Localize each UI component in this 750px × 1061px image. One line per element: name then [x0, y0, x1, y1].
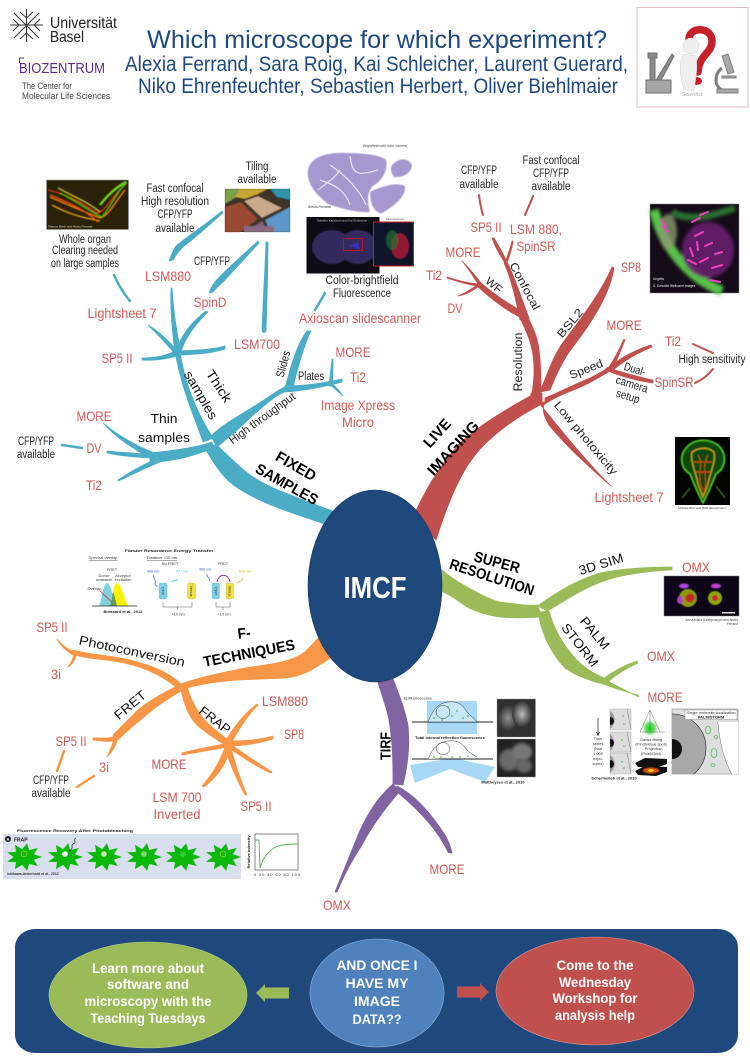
branch labels: SUPER [472, 548, 522, 577]
image: 3D SIM cells [664, 576, 739, 626]
FRET molecules: 528 nm [239, 570, 251, 574]
instrument names: Micro [342, 414, 374, 430]
notes: CFP/YFP [158, 209, 193, 221]
large palm panel: PALM/STORM [698, 714, 725, 720]
branch labels: 3D SIM [577, 550, 625, 578]
instrument names: SP5 II [56, 733, 86, 749]
instrument names: LSM880 [145, 268, 191, 284]
image: FRET figure [87, 548, 251, 616]
instrument names: SP5 II [102, 350, 132, 366]
branch labels [78, 625, 296, 737]
gaussian text: → Projection [640, 746, 662, 751]
gaussian text: (Pixel/Grid) [641, 751, 662, 756]
branch labels: Photoconversion [78, 632, 186, 670]
title: Which microscope for which experiment? [147, 26, 607, 54]
figure title: Fluorescence Recovery After Photobleaching [17, 828, 134, 833]
image: PALM/STORM figure [591, 709, 740, 782]
notes: on large samples [51, 258, 119, 270]
no FRET molecules: 477 nm [176, 570, 188, 574]
branch labels [420, 261, 650, 479]
notes: Fluorescence [333, 288, 391, 300]
branch labels: Dual- [622, 361, 647, 379]
instrument names: Inverted [154, 806, 200, 822]
arrow: right to red [457, 983, 489, 1001]
sub headings [89, 555, 229, 582]
branch labels: Plates [298, 371, 324, 383]
sub headings: Acceptor [115, 573, 132, 578]
credit: Ungella [653, 277, 664, 281]
citation: Schermelleh et al., 2010 [591, 776, 637, 780]
instrument names: LSM 880, [510, 221, 562, 237]
centre ellipse: IMCF [308, 490, 442, 682]
instrument names [36, 619, 308, 822]
Biozentrum tagline: The Center for [22, 81, 72, 91]
instrument names: SP5 II [36, 619, 68, 635]
instrument names: Lightsheet 7 [88, 305, 157, 321]
branch labels: Thick [203, 367, 235, 406]
instrument names: Lightsheet 7 [594, 489, 664, 505]
FRET molecules: Venus [228, 585, 233, 597]
note: available [32, 788, 70, 800]
bubble: wednesday workshop: analysis help [555, 1007, 635, 1023]
tree shape [438, 567, 672, 697]
instrument names: MORE [446, 244, 480, 260]
instrument names: MORE [606, 317, 642, 333]
arrow: time series [596, 718, 600, 736]
left microscope [646, 53, 674, 93]
instrument names: MORE [152, 756, 186, 772]
FRET molecules: <10 nm [217, 612, 231, 616]
branch labels: samples [181, 368, 221, 423]
large palm panel [672, 708, 738, 774]
FRET molecules [199, 568, 251, 616]
bubble: teaching tuesdays: Teaching Tuesdays [90, 1010, 206, 1026]
image: brightfield histology [307, 144, 412, 213]
spectra chart [87, 583, 137, 606]
no FRET molecules: Venus [189, 585, 194, 597]
note: CFP/YFP [33, 775, 69, 787]
connector lines [57, 751, 94, 787]
bubble: image data question: DATA?? [352, 1011, 402, 1027]
icon: scientist with question mark [637, 8, 748, 107]
branch: fixed samples [17, 161, 421, 526]
logo: Biozentrum: Molecular Life Sciences [22, 91, 110, 101]
instrument names: Ti2 [350, 369, 366, 385]
bubble: image data question: IMAGE [354, 993, 400, 1009]
centre label: IMCF [344, 570, 406, 605]
sub headings: Distance <10 nm [147, 555, 178, 560]
time series text: (Nxn [594, 746, 602, 751]
no FRET molecules: CFP [161, 587, 166, 595]
notes: High resolution [141, 196, 209, 208]
image: FRAP figure [3, 828, 301, 879]
notes: available [460, 179, 498, 191]
branch: F-techniques [32, 619, 335, 822]
image: coloured tiles [225, 189, 290, 232]
cell panel: A [7, 836, 10, 842]
branch labels: RESOLUTION [447, 556, 536, 599]
caption bottom: Alexia Ferrand [307, 205, 332, 209]
instrument names: OMX [682, 559, 711, 575]
branch labels: SAMPLES [252, 460, 321, 509]
recovery chart: Relative intensity [246, 835, 251, 868]
icon: Basel star [10, 9, 43, 42]
instrument names: Ti2 [86, 477, 102, 493]
notes: CFP/YFP [194, 256, 230, 268]
branch label: TIRF [377, 732, 394, 760]
cell panel [3, 834, 241, 879]
no FRET molecules: 406 nm [147, 570, 159, 574]
branch labels: TECHNIQUES [202, 637, 296, 671]
branch labels: F- [237, 625, 251, 643]
branch labels: Confocal [507, 261, 542, 312]
instrument names [647, 559, 711, 705]
bubble: teaching tuesdays: software and [107, 976, 189, 992]
instrument names: LSM880 [262, 693, 308, 709]
bubble: image data question [310, 939, 444, 1047]
bubble: teaching tuesdays: Learn more about [92, 960, 204, 976]
cell panel: Ishikawa-Ankerhold et al., 2012 [7, 872, 59, 876]
branch labels: camera [614, 374, 650, 396]
image: Ungella: S. Schudlin Wellcome Images [653, 284, 696, 288]
sub headings: excitation [115, 577, 131, 582]
citation: Brossard et al., 2012 [104, 609, 143, 614]
bubble: teaching tuesdays [49, 942, 247, 1048]
gaussian text [635, 737, 667, 756]
instrument names: Ti2 [665, 333, 681, 349]
branch labels: PALM [577, 614, 613, 652]
bubble: image data question: AND ONCE I [336, 957, 418, 973]
branch labels: FRAP [196, 703, 234, 737]
instrument names [426, 219, 694, 505]
notes [17, 161, 398, 461]
time series text: Time [594, 736, 603, 741]
notes: CFP/YFP [18, 436, 54, 448]
branch labels: Slides [275, 349, 293, 379]
image: Ungella [650, 204, 739, 293]
instrument names: SP8 [621, 259, 641, 275]
instrument names: LSM 700 [152, 789, 202, 805]
branch labels [138, 349, 324, 509]
branch labels: STORM [558, 620, 602, 670]
notes: Clearing needed [52, 245, 118, 257]
large palm panel: Single molecule localization [686, 710, 736, 715]
tree shape [414, 238, 653, 540]
instrument names: SpinD [194, 294, 226, 310]
note [32, 775, 70, 800]
instrument names: OMX [647, 648, 676, 664]
white veins [318, 156, 378, 205]
notes: Fast confocal [146, 183, 204, 195]
branch labels: Speed [568, 358, 605, 382]
notes: available [532, 181, 570, 193]
authors: Alexia Ferrand, Sara Roig, Kai Schleicher, Laurent Guerard, [125, 53, 628, 76]
recovery chart: 0 20 40 60 80 100 [254, 872, 301, 877]
sub headings: FRET [218, 561, 229, 566]
image: TIRF figure [404, 696, 536, 784]
notes: CFP/YFP [461, 165, 497, 177]
image: zebrafish [675, 437, 730, 510]
instrument names: OMX [323, 897, 352, 913]
bubble: wednesday workshop [496, 937, 694, 1045]
sub headings: Donor [99, 573, 110, 578]
branch: super resolution [438, 548, 711, 705]
instrument names: Ti2 [426, 267, 442, 283]
notes: Fast confocal [522, 155, 580, 167]
credit: Anna-Maria Galeppiosyph and Alexia [686, 618, 738, 622]
notes: Tiling [246, 161, 268, 173]
bubble: teaching tuesdays: microscopy with the [84, 993, 212, 1009]
branch: live imaging [414, 155, 746, 540]
tree shape [103, 211, 343, 526]
connector lines [62, 275, 325, 448]
instrument names: DV [86, 440, 102, 456]
micrograph TIRF [497, 739, 536, 777]
time series text: expo- [593, 756, 604, 761]
notes: Whole organ [59, 234, 111, 246]
logo: University of Basel: Basel [50, 29, 84, 46]
arrow: left to green [256, 984, 289, 1002]
sub headings: No FRET [162, 561, 179, 566]
instrument names: SP8 [284, 726, 304, 742]
inset [374, 222, 414, 266]
TIRF diagram: Total internal reflection fluorescence [415, 735, 486, 740]
instrument names [76, 268, 421, 493]
branch labels: setup [614, 388, 641, 406]
caption Scientist: Scientist [682, 92, 703, 98]
branch labels [447, 548, 625, 670]
instrument names: SP5 II [240, 798, 272, 814]
caption: Takahiro Kanamori and Kai Schleicher [317, 218, 367, 222]
time series text: 1,000 [593, 751, 604, 756]
university name: Universität [50, 15, 118, 32]
notes: Color-brightfield [326, 275, 398, 287]
right microscope [716, 54, 738, 93]
instrument names: Axioscan slidescanner [299, 310, 421, 326]
branch labels: High throughput [227, 390, 299, 447]
bubble: image data question: HAVE MY [346, 975, 409, 991]
instrument names: SpinSR [516, 238, 556, 254]
credit: Charles Betz and Wolf Heusermann [678, 506, 726, 510]
panel: footer [15, 929, 738, 1053]
Biozentrum wordmark: BIOZENTRUM [19, 61, 105, 77]
authors [125, 53, 628, 98]
image: brain slice fluorescence: Fluorescence [386, 217, 404, 221]
micrograph widefield [497, 699, 536, 737]
notes [460, 155, 746, 366]
image: 3D SIM cells: Ferrand [727, 622, 738, 626]
notes: CFP/YFP [533, 168, 569, 180]
white figure [680, 38, 699, 90]
bubble: wednesday workshop: Come to the [556, 957, 634, 973]
gaussian spot [640, 710, 665, 738]
instrument names: MORE [336, 344, 370, 360]
tissue lobes [308, 153, 412, 213]
instrument names [323, 861, 464, 913]
branch labels: Thin [150, 411, 178, 426]
instrument names: MORE [648, 689, 682, 705]
instrument names: 3i [99, 759, 109, 775]
caption top: Brightfield with color camera [363, 144, 407, 148]
credit: Stavros Berth and Alexia Ferrand [48, 224, 93, 228]
FRET molecules: CFP [214, 587, 219, 595]
image: whole organ [46, 180, 128, 230]
time series text [592, 736, 604, 766]
branch labels: FRET [111, 687, 149, 723]
instrument names: SP5 II [470, 219, 502, 235]
bubble: wednesday workshop: Workshop for [552, 990, 638, 1006]
logo: University of Basel [10, 9, 118, 46]
instrument names: LSM700 [234, 336, 280, 352]
citation: Mattheyses et al., 2010 [481, 780, 525, 784]
time frames [610, 709, 631, 774]
instrument names: MORE [430, 861, 464, 877]
branch labels: Low photoxicity [551, 400, 620, 478]
widefield diagram: Epifluorescence [404, 696, 433, 700]
branch labels: Resolution [513, 332, 525, 392]
instrument names: 3i [51, 666, 61, 682]
recovery chart [246, 834, 301, 877]
gaussian text: Gauss fitting [640, 737, 662, 742]
branch labels: LIVE [420, 416, 455, 451]
no FRET molecules: >10 nm [171, 612, 185, 616]
instrument names: MORE [76, 408, 112, 424]
sub headings: FRET [107, 567, 118, 572]
notes: available [156, 223, 194, 235]
heat layers [635, 758, 667, 776]
time series text: sures) [592, 761, 604, 766]
branch labels: WF [483, 275, 504, 296]
authors: Niko Ehrenfeuchter, Sebastien Herbert, Oliver Biehlmaier [138, 75, 618, 98]
bubble: wednesday workshop: Wednesday [559, 974, 631, 990]
notes: available [17, 449, 55, 461]
figure title: Förster Resonance Energy Transfer [124, 548, 214, 553]
FRET molecules: 406 nm [199, 568, 211, 572]
branch labels: FIXED [272, 448, 319, 485]
instrument names: Image Xpress [321, 397, 395, 413]
no FRET molecules [147, 570, 196, 616]
red question mark [689, 30, 712, 72]
image: brain slice fluorescence [306, 217, 414, 274]
sub headings: emission [96, 577, 112, 582]
sub headings: Spectral overlap [89, 555, 118, 560]
notes: available [238, 174, 276, 186]
branch labels: BSL2 [555, 307, 586, 341]
time series text: series [593, 741, 603, 746]
branch: TIRF [323, 676, 464, 913]
tree shape [335, 676, 452, 892]
gaussian text: of individual spots [635, 742, 667, 746]
instrument names: SpinSR [654, 374, 694, 390]
logo: Biozentrum [19, 58, 110, 101]
tree shape [57, 632, 335, 795]
connector lines [479, 195, 713, 383]
spectra chart: Overlap [87, 586, 102, 591]
branch labels: samples [138, 430, 191, 445]
instrument names: DV [448, 300, 463, 316]
branch labels: IMAGING [424, 418, 483, 479]
cell panel: FRAP [14, 838, 28, 844]
